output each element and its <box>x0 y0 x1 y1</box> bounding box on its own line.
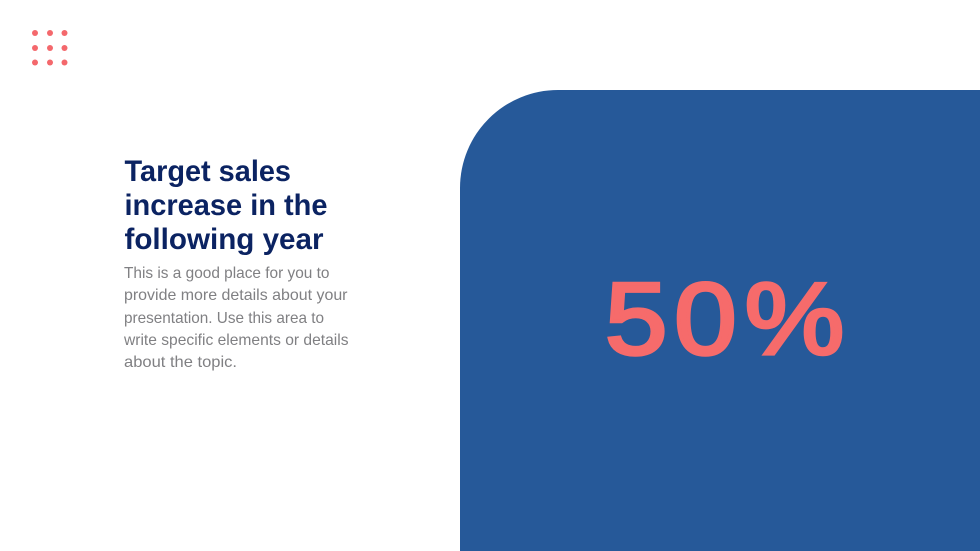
icon: decorative dot grid <box>32 30 68 66</box>
heading: increase in the <box>124 189 328 222</box>
body text: about the topic. <box>124 354 237 371</box>
heading <box>124 155 328 256</box>
body text: presentation. Use this area to <box>124 310 324 327</box>
body text: write specific elements or details <box>123 332 348 349</box>
statistic: 50%: 50% <box>605 262 844 376</box>
body text: provide more details about your <box>124 287 348 304</box>
panel: blue statistic panel <box>460 90 980 551</box>
heading: following year <box>124 223 324 256</box>
body text: This is a good place for you to <box>124 265 330 282</box>
heading: Target sales <box>124 155 291 188</box>
body text <box>123 265 348 371</box>
